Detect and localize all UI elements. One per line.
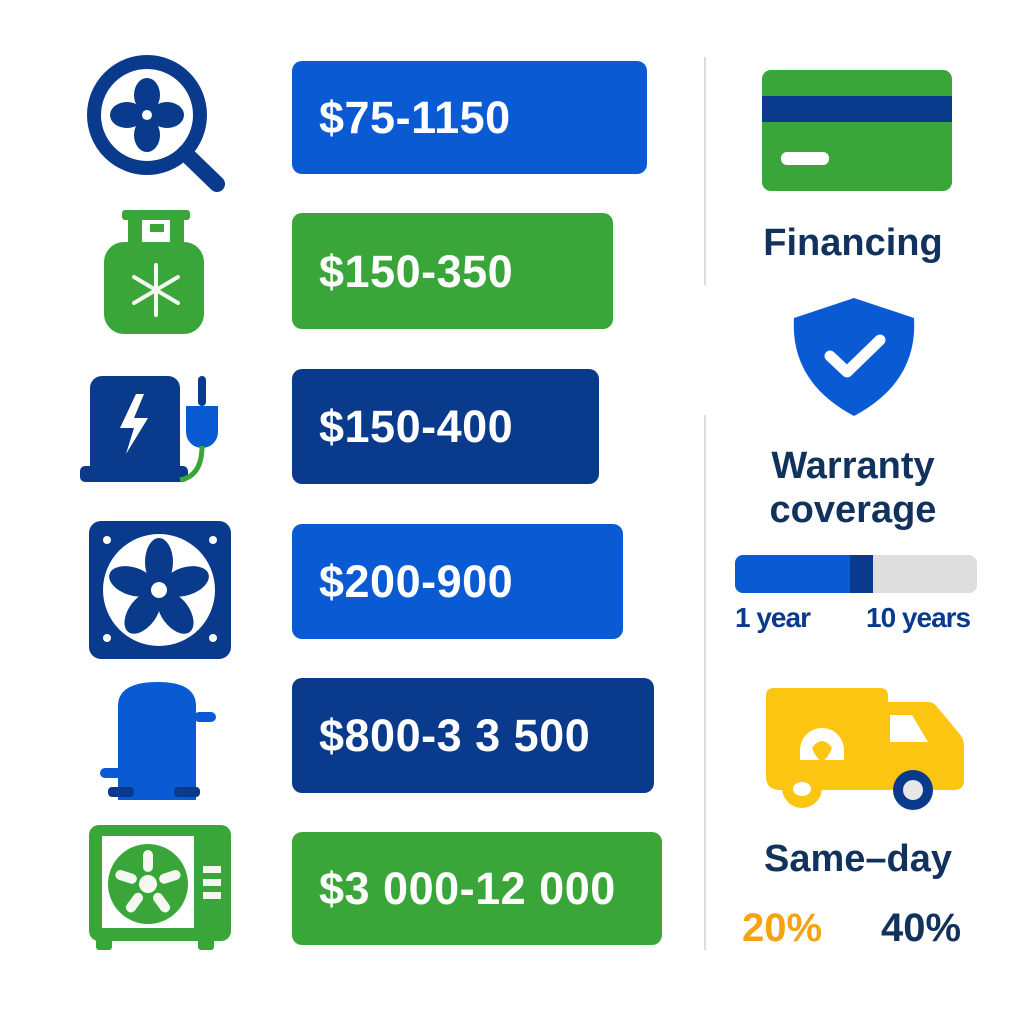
label: Warranty coverage: Warranty: [771, 445, 935, 487]
price bar 6: $3 000-12 000: [319, 863, 616, 914]
price bar 5: $800-3 3 500: [319, 710, 590, 761]
price bar 2: $150-350: [319, 246, 513, 296]
icon: electrical unit with plug: [80, 376, 218, 482]
price bar 1: $75-1150: [319, 92, 511, 143]
price bar 4: $200-900: [319, 556, 513, 607]
icon: magnifier fan: [87, 55, 225, 192]
icon: credit card: [762, 70, 952, 191]
price bar 6: [292, 832, 662, 945]
icon: outdoor AC unit: [89, 825, 231, 950]
price bar 3: $150-400: [319, 401, 513, 452]
price bar 2: [292, 213, 613, 329]
label: Same-day: Same–day: [764, 838, 952, 880]
price bar 1: [292, 61, 647, 174]
price bar 4: [292, 524, 623, 639]
label: Financing: Financing: [763, 222, 943, 264]
icon: exhaust fan: [89, 521, 231, 659]
warranty progress bar: [735, 555, 977, 593]
icon: delivery truck: [766, 688, 964, 810]
label: 1 year: 1 year: [735, 602, 810, 633]
price bar 5: [292, 678, 654, 793]
label: Warranty coverage: coverage: [770, 489, 936, 531]
price bar 3: [292, 369, 599, 484]
icon: refrigerant tank: [104, 210, 204, 334]
label: Warranty coverage: [770, 445, 936, 531]
icon: compressor: [100, 682, 216, 800]
stat: 20%: 20%: [742, 906, 822, 950]
label: 10 years: 10 years: [866, 602, 970, 633]
stat: 40%: 40%: [881, 906, 961, 950]
icon: shield with check: [794, 298, 914, 416]
